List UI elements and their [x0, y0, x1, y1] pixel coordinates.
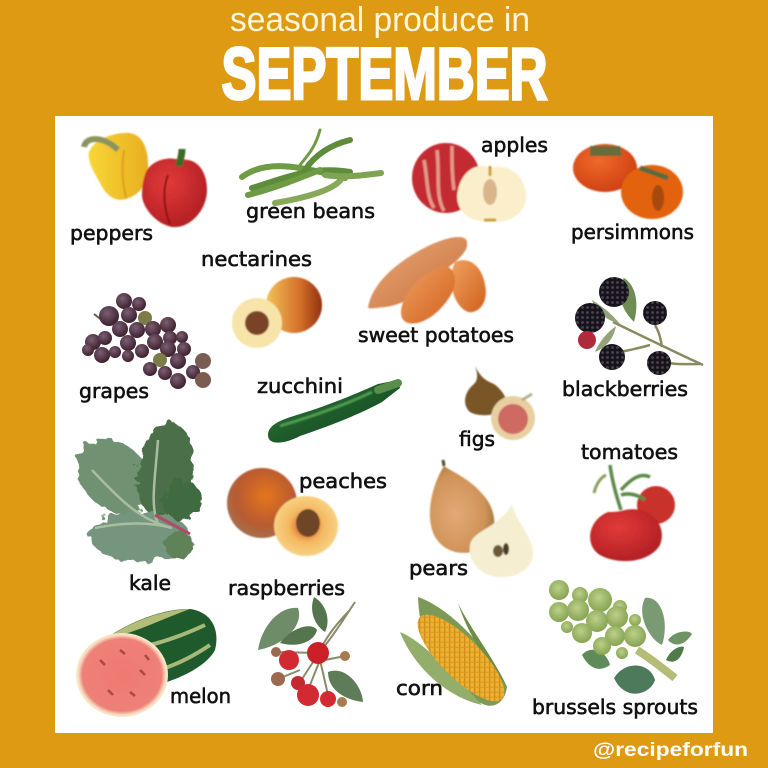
panel: white produce area — [55, 116, 713, 733]
label: nectarines: nectarines — [201, 247, 312, 271]
icon: pears — [430, 460, 533, 577]
label: peppers: peppers — [70, 221, 153, 245]
icon: blackberries — [575, 277, 703, 375]
icon: grapes — [82, 293, 211, 389]
icon: kale — [62, 419, 202, 561]
icon: persimmons — [573, 144, 683, 219]
label: apples: apples — [481, 133, 548, 157]
labels — [70, 133, 698, 719]
icon: peppers — [84, 133, 207, 227]
label: corn: corn — [396, 676, 443, 700]
icon: figs — [465, 366, 535, 440]
title: seasonal produce in: seasonal produce in — [230, 1, 530, 39]
label: blackberries: blackberries — [562, 377, 688, 401]
icon: green beans — [242, 130, 381, 203]
icon: corn — [400, 597, 516, 713]
heading: SEPTEMBER: SEPTEMBER — [222, 34, 548, 115]
label: persimmons: persimmons — [571, 220, 694, 244]
label: figs: figs — [459, 427, 495, 451]
icon: tomatoes — [590, 465, 675, 561]
label: tomatoes: tomatoes — [581, 440, 678, 464]
icon: melon — [76, 609, 216, 717]
icon: zucchini — [268, 380, 400, 443]
icon: peaches — [227, 468, 338, 556]
icon: raspberries — [258, 597, 363, 707]
icon: sweet potatoes — [368, 237, 486, 324]
label: raspberries: raspberries — [228, 576, 345, 600]
label: grapes: grapes — [79, 379, 149, 403]
label: brussels sprouts: brussels sprouts — [532, 695, 698, 719]
icon: nectarines — [232, 277, 322, 348]
label: pears: pears — [409, 556, 468, 580]
label: sweet potatoes: sweet potatoes — [358, 323, 514, 347]
icon: apples — [412, 143, 526, 222]
label: zucchini: zucchini — [257, 374, 343, 398]
credit handle: @recipeforfun — [593, 740, 748, 761]
label: kale: kale — [129, 571, 171, 595]
label: melon: melon — [170, 684, 231, 708]
label: green beans: green beans — [246, 199, 375, 223]
label: peaches: peaches — [299, 469, 387, 493]
icon: brussels sprouts — [549, 580, 692, 694]
